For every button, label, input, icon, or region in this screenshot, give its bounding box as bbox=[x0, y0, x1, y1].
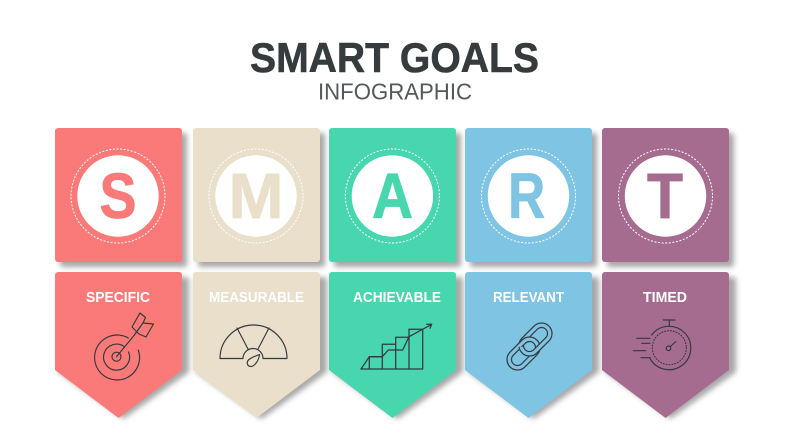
panel: T letter card bbox=[602, 128, 734, 267]
label: Specific: SPECIFIC bbox=[86, 290, 151, 306]
panel: A letter card bbox=[329, 128, 461, 267]
icon: chain link bbox=[506, 322, 553, 371]
subtitle: INFOGRAPHIC bbox=[318, 78, 472, 104]
icon: rising bar chart with arrow bbox=[361, 324, 432, 369]
panel: Specific bbox=[55, 272, 189, 419]
panel: Achievable bbox=[329, 272, 463, 419]
title: SMART GOALS bbox=[250, 34, 539, 81]
label: Relevant: RELEVANT bbox=[493, 290, 564, 306]
letter R: R bbox=[508, 160, 545, 232]
icon: gauge bbox=[220, 325, 287, 366]
letter A: A bbox=[372, 160, 413, 232]
icon: target with arrow bbox=[95, 313, 154, 380]
panel: Timed bbox=[602, 272, 736, 419]
panel: Relevant bbox=[465, 272, 599, 419]
label: Measurable: MEASURABLE bbox=[209, 290, 304, 306]
letter M: M bbox=[228, 160, 284, 232]
panel: S letter card bbox=[55, 128, 187, 267]
label: Timed: TIMED bbox=[643, 290, 687, 306]
icon: stopwatch bbox=[633, 320, 691, 370]
letter T: T bbox=[647, 160, 683, 232]
letter S: S bbox=[100, 160, 136, 232]
panel: R letter card bbox=[465, 128, 597, 267]
label: Achievable: ACHIEVABLE bbox=[353, 290, 441, 306]
panel: Measurable bbox=[193, 272, 327, 419]
panel: M letter card bbox=[193, 128, 325, 267]
